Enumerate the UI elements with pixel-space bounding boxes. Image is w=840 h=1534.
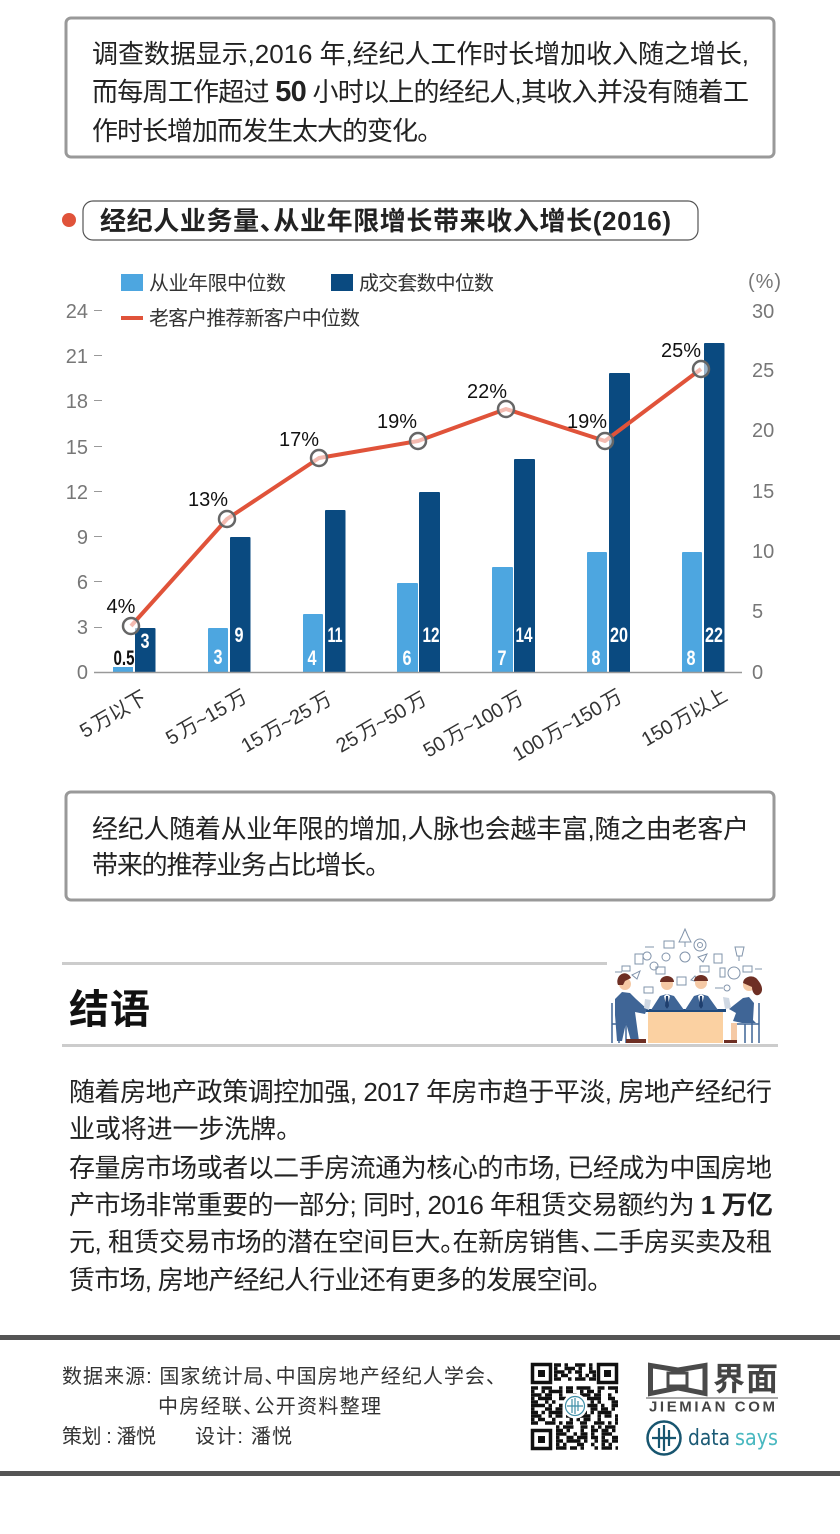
logo: Jiemian [646, 1361, 778, 1416]
line series: referral share: 4% [107, 596, 136, 618]
footer credits: 设计: 潘悦 [195, 1425, 292, 1448]
line series: referral share: 19% [567, 411, 607, 433]
left axis: 3 [77, 617, 88, 639]
footer bottom rule [0, 1471, 840, 1476]
callout: working hours and income: 作时长增加而发生太大的变化。 [92, 116, 430, 146]
chart legend: 老客户推荐新客户中位数 [149, 307, 360, 330]
left axis: 6 [77, 572, 88, 594]
x axis labels: 100 万~150 万 [509, 686, 626, 766]
right axis: 30 [752, 301, 774, 323]
x axis labels: 15 万~25 万 [237, 688, 336, 758]
chart legend: 成交套数中位数 [359, 272, 494, 295]
left axis [66, 301, 102, 684]
bar chart: 6 [402, 647, 412, 670]
line series: referral share [107, 340, 709, 634]
logo: Jiemian: 界面 [713, 1361, 778, 1397]
chart legend [121, 272, 494, 330]
chart heading [62, 201, 698, 240]
bar chart: 8 [592, 647, 601, 670]
chart legend: 从业年限中位数 [149, 272, 286, 295]
bar chart [94, 343, 742, 673]
x axis labels: 25 万~50 万 [332, 688, 431, 758]
icon: QR code [531, 1364, 618, 1448]
bar chart: 14 [516, 624, 533, 647]
bar chart: 8 [686, 647, 696, 670]
callout: working hours and income: 而每周工作超过 50 小时以上的经纪人,其收入并没有随着工 [92, 76, 749, 108]
right axis: 15 [752, 481, 774, 503]
conclusion body text [69, 1077, 773, 1295]
illustration: business meeting [612, 929, 762, 1043]
line series: referral share: 22% [467, 381, 507, 403]
logo: data says: data [688, 1426, 730, 1451]
bar chart: 22 [705, 624, 723, 647]
callout: referrals grow with experience [66, 792, 774, 900]
footer credits: 中房经联、公开资料整理 [158, 1395, 381, 1418]
bar chart: 0.5 [114, 647, 135, 670]
left axis: 15 [66, 437, 88, 459]
x axis labels: 50 万~100 万 [420, 687, 527, 762]
right axis: 25 [752, 360, 774, 382]
conclusion body text: 业或将进一步洗牌。 [69, 1114, 289, 1144]
callout: working hours and income: 调查数据显示,2016 年,经纪人工作时长增加收入随之增长, [92, 39, 749, 69]
logo: data says: says [735, 1426, 778, 1451]
logo: data says [648, 1422, 778, 1454]
right axis: 5 [752, 601, 763, 623]
right axis: 10 [752, 541, 774, 563]
footer top rule [0, 1335, 840, 1340]
conclusion body text: 赁市场, 房地产经纪人行业还有更多的发展空间。 [69, 1265, 600, 1295]
conclusion body text: 产市场非常重要的一部分; 同时, 2016 年租赁交易额约为 1 万亿 [69, 1190, 773, 1220]
bar chart: 3 [140, 630, 150, 653]
line series: referral share: 17% [279, 429, 319, 451]
x axis labels: 5 万以下 [76, 687, 151, 743]
conclusion body text: 元, 租赁交易市场的潜在空间巨大。在新房销售、二手房买卖及租 [69, 1227, 772, 1257]
bar chart: 4 [308, 647, 317, 670]
bar chart: 11 [328, 624, 343, 647]
left axis: 9 [77, 527, 88, 549]
line series: referral share: 19% [377, 411, 417, 433]
line series: referral share: 25% [661, 340, 701, 362]
footer credits: 策划 : 潘悦 [62, 1425, 156, 1448]
conclusion body text: 随着房地产政策调控加强, 2017 年房市趋于平淡, 房地产经纪行 [69, 1077, 772, 1107]
footer credits [62, 1365, 496, 1448]
section heading: conclusion: 结语 [69, 988, 150, 1032]
left axis: 21 [66, 346, 88, 368]
left axis: 0 [77, 662, 88, 684]
x axis labels: 150 万以上 [637, 684, 731, 751]
conclusion body text: 存量房市场或者以二手房流通为核心的市场, 已经成为中国房地 [69, 1153, 772, 1183]
left axis: 12 [66, 482, 88, 504]
right axis: (%) [748, 271, 781, 293]
bar chart: 3 [214, 646, 222, 669]
right axis: 20 [752, 420, 774, 442]
callout: referrals grow with experience: 带来的推荐业务占比增长。 [92, 850, 378, 880]
line series: referral share: 13% [188, 489, 228, 511]
section heading: conclusion [62, 962, 778, 1047]
right axis [748, 271, 781, 684]
x axis labels: 5 万~15 万 [162, 686, 251, 750]
bar chart: 20 [610, 624, 628, 647]
callout: working hours and income [66, 18, 774, 157]
bar chart: 12 [422, 624, 440, 647]
right axis: 0 [752, 662, 763, 684]
bar chart: 9 [234, 624, 244, 647]
bar chart: 7 [498, 647, 506, 670]
logo: Jiemian: JIEMIAN COM [649, 1398, 775, 1416]
left axis: 18 [66, 391, 88, 413]
chart heading: 经纪人业务量、从业年限增长带来收入增长(2016) [100, 206, 671, 236]
left axis: 24 [66, 301, 88, 323]
x axis labels [76, 684, 731, 766]
callout: referrals grow with experience: 经纪人随着从业年限的增加,人脉也会越丰富,随之由老客户 [92, 814, 749, 844]
footer credits: 数据来源: 国家统计局、中国房地产经纪人学会、 [62, 1365, 496, 1388]
